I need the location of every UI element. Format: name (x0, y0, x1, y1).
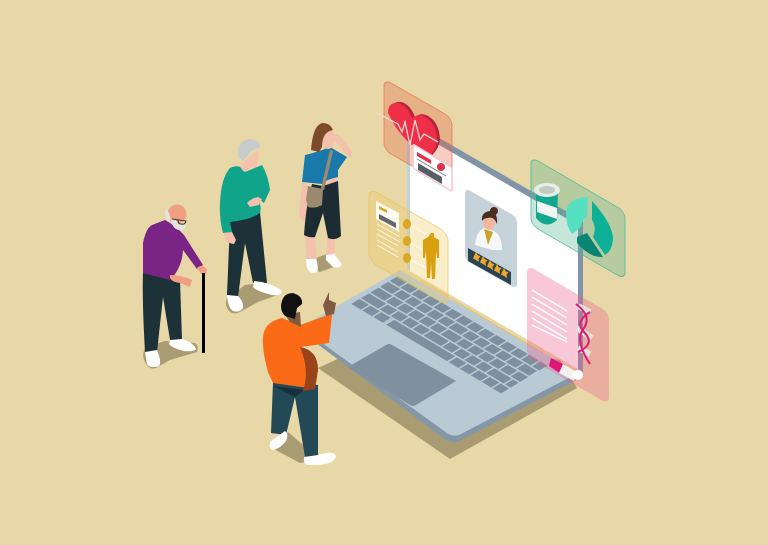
shoes (227, 281, 282, 312)
rating bar (468, 248, 511, 285)
waist (320, 176, 338, 187)
shirt (302, 147, 347, 184)
capris (304, 181, 341, 239)
shoes (145, 339, 196, 367)
shadow (226, 284, 280, 314)
neck and hand (285, 292, 336, 327)
panel: yellow body chart (369, 188, 543, 353)
icon: dna (576, 304, 592, 364)
head (281, 293, 302, 319)
icon: human figure (423, 233, 439, 279)
markers (403, 219, 411, 263)
id card (413, 144, 452, 191)
trackpad (348, 344, 456, 406)
panel: heart (375, 79, 452, 191)
cane (202, 273, 205, 353)
shoes (306, 254, 342, 273)
stars (473, 252, 508, 278)
record card (376, 201, 399, 232)
icon: heart (375, 102, 440, 157)
hinge line (420, 280, 543, 353)
icon: pie chart (566, 197, 613, 257)
hair (311, 123, 333, 152)
doctor card (465, 188, 517, 289)
text lines (532, 290, 567, 342)
head (168, 204, 186, 224)
icon: syringe (549, 358, 583, 381)
belly shade (300, 347, 318, 391)
beard and hair (165, 208, 186, 230)
person: woman with bag (299, 123, 352, 273)
text lines (377, 224, 431, 269)
sweater (220, 165, 270, 233)
shoes (270, 431, 336, 465)
icon: pill bottle (534, 183, 560, 225)
screen (407, 120, 583, 372)
person: man in teal sweater (220, 139, 282, 314)
hands (170, 266, 207, 287)
neck and face (240, 150, 259, 172)
sweater (143, 220, 203, 280)
panel: pink dna (527, 265, 609, 405)
hands (224, 197, 262, 244)
person: man in orange pointing (263, 292, 336, 465)
skin: legs and arms (299, 134, 352, 262)
trousers (227, 212, 267, 297)
bag (306, 150, 333, 208)
panel: green pills and chart (531, 157, 625, 280)
person: old man with cane (143, 204, 207, 368)
keyboard (355, 279, 543, 391)
sweater (263, 315, 332, 389)
shadow (272, 432, 306, 463)
shadow (316, 252, 342, 272)
laptop (302, 120, 583, 459)
hair (238, 139, 260, 161)
head (321, 129, 335, 149)
shadow (143, 341, 198, 368)
trousers (143, 272, 182, 352)
trousers (271, 382, 318, 457)
doctor (475, 207, 502, 250)
glasses (172, 219, 186, 224)
